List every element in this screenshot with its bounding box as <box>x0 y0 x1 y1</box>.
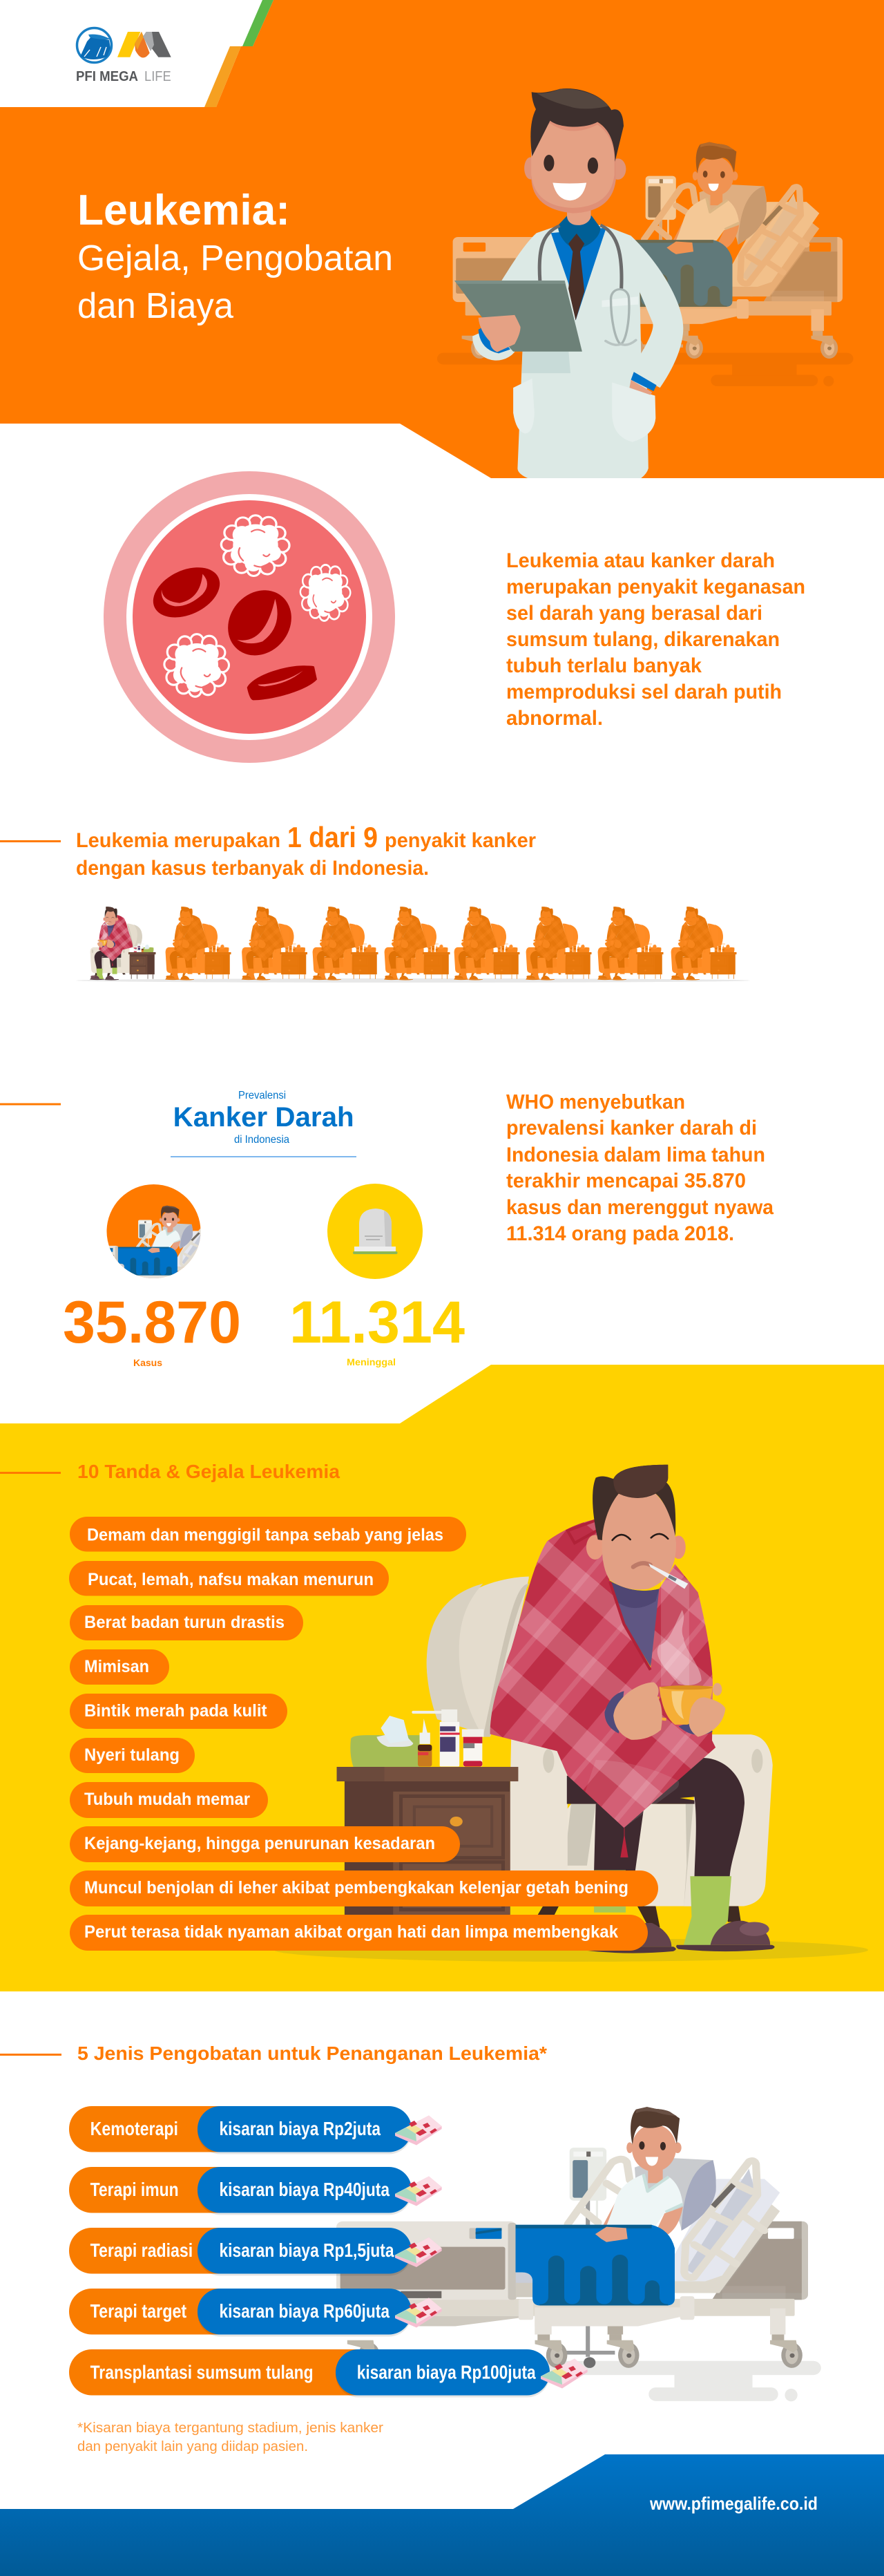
heading: prevalensi kanker darah: Kanker Darah <box>173 1102 354 1133</box>
white cell 2 <box>300 565 350 621</box>
symptom 5 <box>70 1694 287 1729</box>
heading: 1 of 9 cancers <box>76 821 536 880</box>
symptom 7 <box>70 1782 268 1818</box>
stat: cases: Kasus <box>133 1357 162 1368</box>
text: WHO statement: Indonesia dalam lima tahun <box>506 1144 765 1166</box>
footer: www.pfimegalife.co.id <box>649 2493 818 2514</box>
text: WHO statement: 11.314 orang pada 2018. <box>506 1222 734 1245</box>
treatment 1 <box>69 2106 442 2154</box>
treatment 1: kisaran biaya Rp2juta <box>220 2118 381 2139</box>
list: symptoms <box>69 1517 658 1951</box>
text: leukemia definition: memproduksi sel darah putih <box>506 681 782 703</box>
symptom 6 <box>70 1738 195 1773</box>
treatment 1: Kemoterapi <box>90 2118 178 2139</box>
sick persons, orange <box>165 907 736 980</box>
panel: symptoms background <box>0 1365 884 1991</box>
text: WHO statement: kasus dan merenggut nyawa <box>506 1196 774 1219</box>
text: WHO statement <box>506 1090 774 1245</box>
text: leukemia definition: tubuh terlalu banyak <box>506 654 702 677</box>
treatment 3: Terapi radiasi <box>90 2239 193 2261</box>
title <box>77 187 393 326</box>
heading: symptoms: 10 Tanda & Gejala Leukemia <box>77 1461 340 1482</box>
symptom 8 <box>70 1826 460 1862</box>
symptom 4: Mimisan <box>84 1657 149 1676</box>
symptom 3 <box>70 1605 303 1640</box>
title: dan Biaya <box>77 286 233 326</box>
illustration: sick man in armchair <box>337 1465 775 1953</box>
text: leukemia definition: abnormal. <box>506 707 603 730</box>
symptom 4 <box>70 1649 169 1685</box>
heading: 1 of 9 cancers: dengan kasus terbanyak di Indonesia. <box>76 857 429 880</box>
heading: 1 of 9 cancers: Leukemia merupakan <box>76 829 280 852</box>
treatment 4 <box>69 2289 442 2337</box>
treatment 2: Terapi imun <box>90 2179 179 2200</box>
footnote: dan penyakit lain yang diidap pasien. <box>77 2439 308 2454</box>
stripe: orange accent <box>204 46 241 107</box>
stripe: green accent <box>242 0 273 46</box>
heading: prevalensi kanker darah <box>171 1090 356 1157</box>
logo: PFI Mega Life: PFI MEGA <box>76 69 138 84</box>
illustration: blood cells circle <box>104 471 395 763</box>
white cell 1 <box>221 515 289 576</box>
symptom 10 <box>70 1915 648 1951</box>
treatment 2: kisaran biaya Rp40juta <box>220 2179 390 2200</box>
illustration: patient in hospital bed <box>318 2107 821 2401</box>
heading: 1 of 9 cancers: 1 dari 9 <box>287 821 378 853</box>
text: WHO statement: terakhir mencapai 35.870 <box>506 1169 746 1193</box>
treatment 3: kisaran biaya Rp1,5juta <box>220 2239 394 2261</box>
symptom 7: Tubuh mudah memar <box>84 1790 250 1809</box>
red blood cell 2 <box>215 578 305 668</box>
heading: 1 of 9 cancers: penyakit kanker <box>385 829 536 852</box>
pictogram: 1 of 9 <box>76 907 750 983</box>
footnote: *Kisaran biaya tergantung stadium, jenis kanker <box>77 2421 383 2436</box>
symptom 9: Muncul benjolan di leher akibat pembengkakan kelenjar getah bening <box>84 1878 628 1897</box>
red blood cell 3 <box>247 665 317 700</box>
text: WHO statement: prevalensi kanker darah di <box>506 1117 757 1139</box>
icon: patient circle <box>106 1184 200 1278</box>
illustration: patient in bed, hero <box>437 142 854 386</box>
logo: PFI Mega Life <box>76 28 171 84</box>
treatment 5 <box>69 2349 588 2398</box>
red blood cell 1 <box>145 558 228 627</box>
text: leukemia definition: merupakan penyakit keganasan <box>506 576 805 598</box>
symptom 8: Kejang-kejang, hingga penurunan kesadaran <box>84 1834 435 1853</box>
treatment 5: kisaran biaya Rp100juta <box>357 2362 536 2383</box>
logo: PFI Mega Life: LIFE <box>144 69 171 84</box>
text: leukemia definition: sel darah yang berasal dari <box>506 602 762 625</box>
background: orange hero <box>0 0 884 478</box>
text: WHO statement: WHO menyebutkan <box>506 1090 685 1114</box>
illustration: doctor <box>454 88 683 478</box>
treatment 4: Terapi target <box>90 2300 186 2322</box>
footer <box>0 2454 884 2576</box>
title: Leukemia: <box>77 187 290 234</box>
white cell 3 <box>164 634 229 697</box>
text: leukemia definition: sumsum tulang, dikarenakan <box>506 628 780 651</box>
symptom 10: Perut terasa tidak nyaman akibat organ hati dan limpa membengkak <box>84 1922 618 1942</box>
ground shadow <box>274 1938 868 1962</box>
symptom 2 <box>69 1561 389 1596</box>
symptom 1: Demam dan menggigil tanpa sebab yang jelas <box>87 1526 443 1545</box>
heading: treatments: 5 Jenis Pengobatan untuk Penanganan Leukemia* <box>77 2043 547 2064</box>
sick person, highlighted <box>90 907 155 980</box>
stat: cases: 35.870 <box>63 1289 241 1356</box>
treatment 4: kisaran biaya Rp60juta <box>220 2300 390 2322</box>
stat: deaths: Meninggal <box>347 1356 396 1367</box>
treatment 3 <box>69 2228 442 2276</box>
heading: prevalensi kanker darah: Prevalensi <box>238 1090 286 1101</box>
title: Gejala, Pengobatan <box>77 238 393 278</box>
symptom 1 <box>70 1517 466 1552</box>
symptom 6: Nyeri tulang <box>84 1745 180 1765</box>
heading: prevalensi kanker darah: di Indonesia <box>234 1134 289 1146</box>
text: leukemia definition: Leukemia atau kanker darah <box>506 549 775 572</box>
treatment 2 <box>69 2167 442 2215</box>
stat: deaths: 11.314 <box>289 1289 465 1356</box>
symptom 9 <box>70 1871 658 1906</box>
text: leukemia definition <box>506 549 805 730</box>
symptom 3: Berat badan turun drastis <box>84 1613 285 1632</box>
symptom 2: Pucat, lemah, nafsu makan menurun <box>88 1570 374 1589</box>
list: treatments and costs <box>69 2106 588 2398</box>
symptom 5: Bintik merah pada kulit <box>84 1701 267 1721</box>
footnote <box>77 2421 383 2454</box>
treatment 5: Transplantasi sumsum tulang <box>90 2362 314 2383</box>
icon: gravestone circle <box>327 1184 423 1279</box>
